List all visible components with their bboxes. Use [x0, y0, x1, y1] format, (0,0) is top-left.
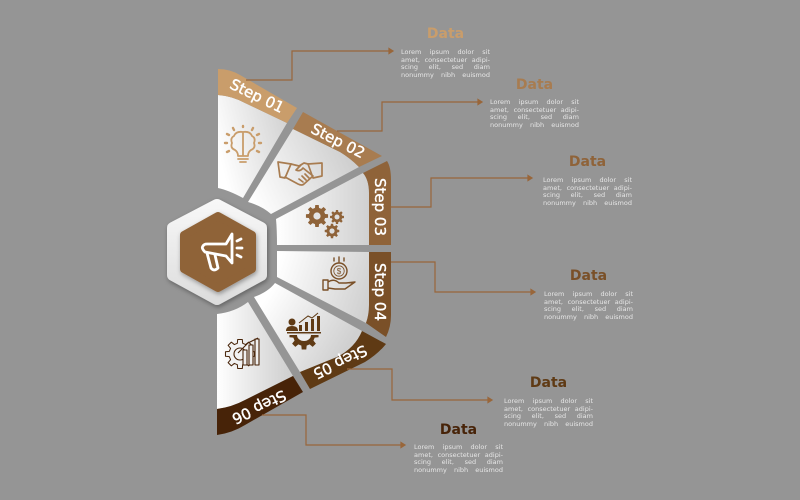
radial step diagram [166, 48, 536, 448]
infographic canvas [166, 28, 633, 474]
text block: data 03: Lorem ipsum dolor sit [543, 176, 632, 184]
text block: data 04: scing elit, sed diam [544, 305, 633, 313]
icon: hand holding coin: $ [337, 267, 342, 276]
segment: step 01: Step 01 [227, 75, 287, 117]
infographic canvas: Data [440, 422, 477, 438]
icon: hand holding coin [323, 257, 355, 290]
text block: data 01 [401, 26, 490, 79]
text block: data 03: amet, consectetuer adipi- [543, 184, 632, 192]
icon: brain light bulb [225, 126, 261, 162]
text block: data 05: Lorem ipsum dolor sit [504, 397, 593, 405]
connector arrow: step 02 [337, 100, 482, 131]
segment: step 02: Step 02 [308, 120, 368, 162]
icon: gears [306, 205, 344, 238]
connector arrow: step 04 [391, 262, 535, 294]
text block: data 02: scing elit, sed diam [490, 113, 579, 121]
infographic canvas: Data [516, 77, 553, 93]
text block: data 06: scing elit, sed diam [414, 458, 503, 466]
infographic canvas: Data [570, 268, 607, 284]
segment: step 06 [217, 302, 303, 435]
segment: step 02 [248, 112, 382, 214]
text block: data 06: nonummy nibh euismod [414, 466, 503, 474]
central hexagon with megaphone [173, 205, 261, 299]
text block: data 03: scing elit, sed diam [543, 191, 632, 199]
text block: data 03 [543, 154, 632, 207]
connector arrow: step 06 [262, 415, 405, 448]
text block: data 04: Lorem ipsum dolor sit [544, 290, 633, 298]
text block: data 05: scing elit, sed diam [504, 412, 593, 420]
connector arrow: step 03 [391, 176, 532, 207]
text block: data 01: nonummy nibh euismod [401, 71, 490, 79]
text block: data 02: nonummy nibh euismod [490, 121, 579, 129]
text block: data 06 [414, 422, 503, 474]
infographic canvas: Data [530, 375, 567, 391]
text block: data 05: nonummy nibh euismod [504, 420, 593, 428]
connector arrow: step 01 [246, 48, 393, 80]
segment: step 05 [254, 283, 386, 389]
segment: step 04: Step 04 [371, 263, 389, 321]
icon: megaphone [202, 234, 242, 270]
text block: data 02 [490, 77, 579, 129]
text block: data 05: amet, consectetuer adipi- [504, 405, 593, 413]
connector arrow: step 05 [347, 369, 492, 402]
infographic canvas: Data [427, 26, 464, 42]
text block: data 04: amet, consectetuer adipi- [544, 298, 633, 306]
segment: step 03 [276, 161, 391, 245]
text block: data 01: scing elit, sed diam [401, 63, 490, 71]
infographic canvas: Data [569, 154, 606, 170]
segment: step 06: Step 06 [229, 386, 289, 428]
text block: data 04: nonummy nibh euismod [544, 313, 633, 321]
segment: step 04 [277, 251, 391, 337]
segment: step 01 [218, 69, 297, 198]
icon: handshake [278, 162, 322, 185]
icon: cog with bar chart [225, 338, 259, 369]
text block: data 03: nonummy nibh euismod [543, 199, 632, 207]
text block: data 01: amet, consectetuer adipi- [401, 56, 490, 64]
text block: data 06: amet, consectetuer adipi- [414, 451, 503, 459]
text block: data 02: Lorem ipsum dolor sit [490, 98, 579, 106]
text block: data 01: Lorem ipsum dolor sit [401, 48, 490, 56]
text block: data 02: amet, consectetuer adipi- [490, 106, 579, 114]
text block: data 05 [504, 375, 593, 428]
text block: data 04 [544, 268, 633, 321]
segment: step 03: Step 03 [371, 178, 389, 236]
icon: gear with growth chart [286, 313, 321, 350]
text block: data 06: Lorem ipsum dolor sit [414, 443, 503, 451]
segment: step 05: Step 05 [310, 341, 370, 383]
